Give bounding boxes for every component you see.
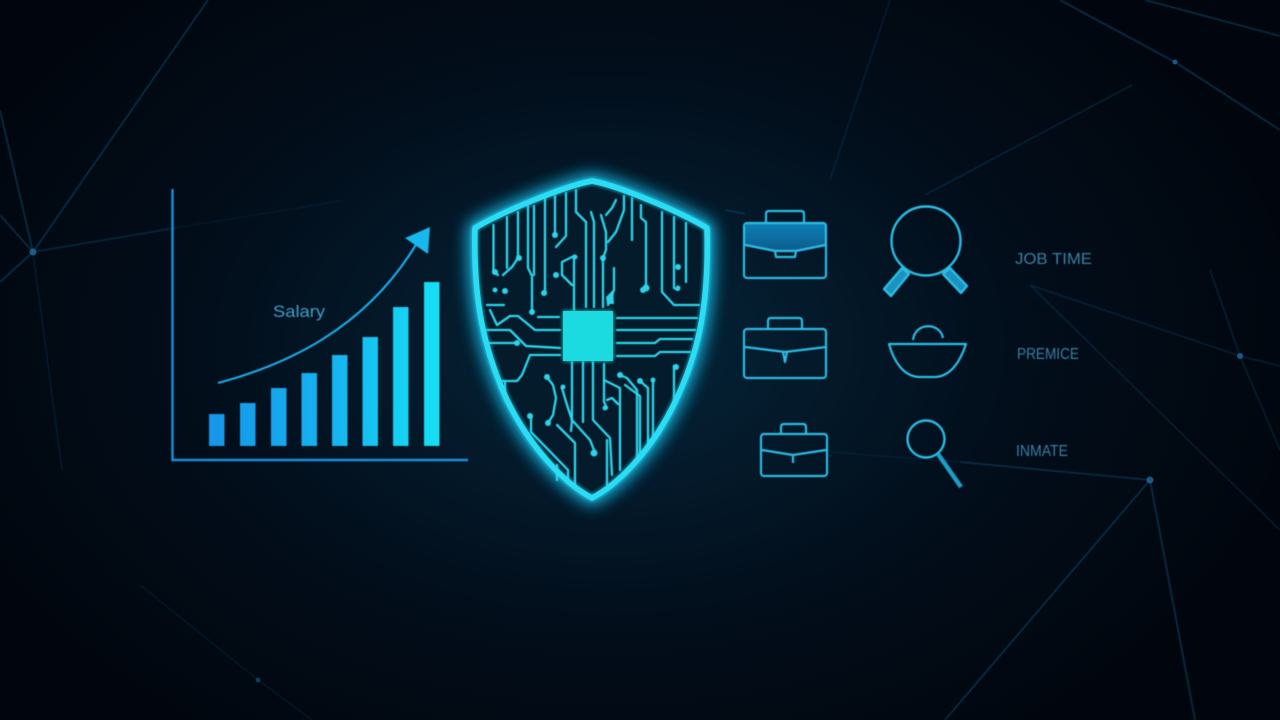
bar chart: salary growth	[172, 189, 468, 460]
shield inner fill	[475, 181, 707, 498]
icon: small briefcase	[761, 424, 827, 476]
icon: bowl with handle	[889, 326, 966, 377]
trend arrow	[218, 227, 430, 383]
icon row 1: filled briefcase, round magnifier, label	[744, 206, 1092, 296]
icon: magnifier	[908, 420, 961, 487]
label: premice: PREMICE	[1017, 346, 1079, 363]
icon: briefcase outline	[744, 318, 826, 378]
icon: round magnifier with two handles	[884, 206, 967, 296]
icon row 3: small briefcase, magnifier, label	[761, 420, 1068, 487]
shield outline	[475, 181, 707, 498]
chart bars	[209, 282, 440, 446]
chart label: Salary	[273, 302, 326, 321]
shield with circuit	[475, 181, 707, 498]
central chip	[563, 311, 613, 361]
circuit pads	[492, 232, 681, 456]
label: inmate: INMATE	[1016, 443, 1068, 460]
label: job time: JOB TIME	[1015, 251, 1092, 268]
circuit traces	[487, 190, 699, 485]
shield glow	[475, 181, 707, 498]
icon: briefcase filled	[744, 211, 826, 278]
icon row 2: briefcase, bowl, label	[744, 318, 1079, 378]
chart axes	[172, 189, 468, 460]
